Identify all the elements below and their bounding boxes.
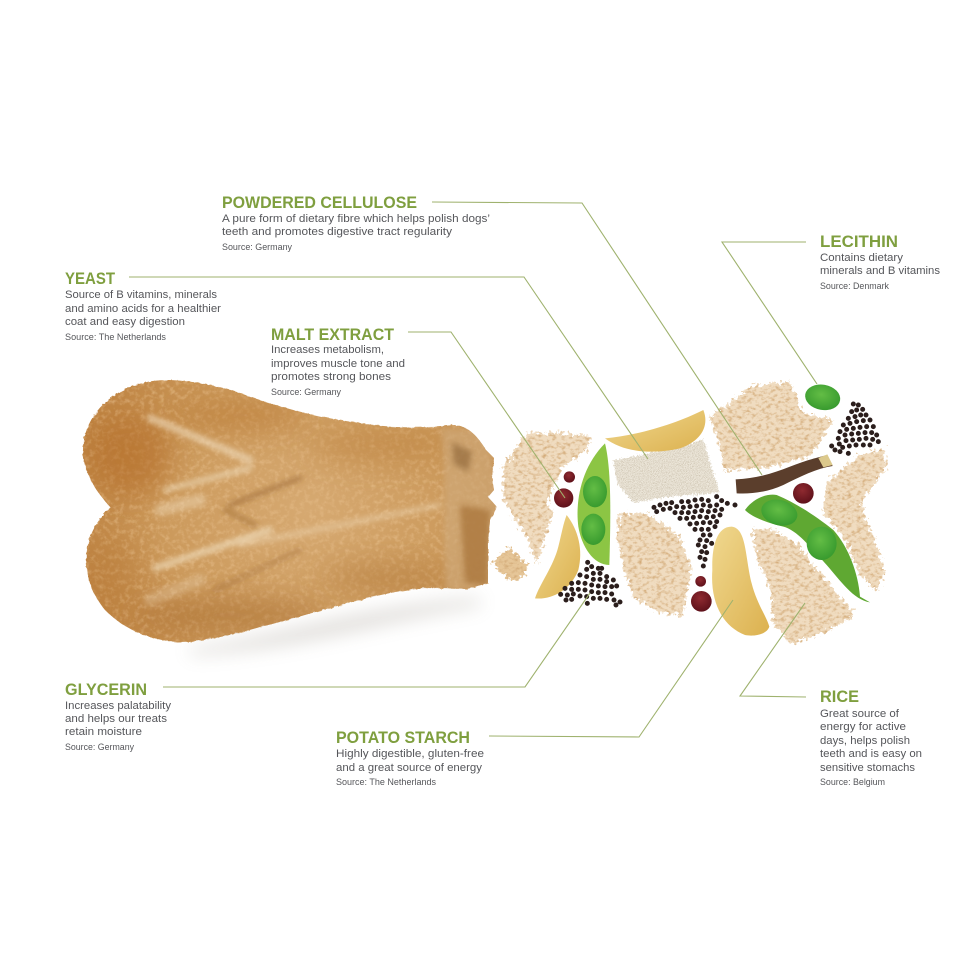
shadow under treat <box>190 598 480 655</box>
peppercorn cluster: top right <box>832 404 878 453</box>
label: lecithin: minerals and B vitamins <box>820 265 940 277</box>
label: malt extract <box>271 326 405 397</box>
label: potato starch: Highly digestible, gluten-free <box>336 748 484 760</box>
rice: top right patch <box>710 382 833 470</box>
ingredient pile <box>493 382 887 643</box>
label: rice <box>820 688 922 787</box>
rice: right patch <box>823 448 887 592</box>
label: malt extract: improves muscle tone and <box>271 358 405 370</box>
label: powdered cellulose: A pure form of dietary fibre which helps polish dogs’ <box>222 213 490 225</box>
label: yeast: and amino acids for a healthier <box>65 303 221 315</box>
rice: bottom patch <box>752 528 855 643</box>
label: lecithin: Source: Denmark <box>820 281 889 291</box>
label: powdered cellulose <box>222 194 490 252</box>
label: malt extract: MALT EXTRACT <box>271 326 394 344</box>
connector lines <box>129 202 817 737</box>
liquorice root <box>736 454 833 493</box>
pea pod: left <box>578 443 610 565</box>
label: glycerin: retain moisture <box>65 726 142 738</box>
label: powdered cellulose: teeth and promotes digestive tract regularity <box>222 226 453 238</box>
label: yeast: coat and easy digestion <box>65 316 185 328</box>
label: rice: sensitive stomachs <box>820 762 915 774</box>
peppercorn cluster: bottom <box>561 562 620 605</box>
rice: left patch <box>503 433 590 565</box>
rice: centre patch <box>618 513 692 615</box>
label: lecithin: Contains dietary <box>820 252 904 264</box>
potato wedge: left <box>535 515 580 599</box>
label: yeast: Source of B vitamins, minerals <box>65 289 218 301</box>
crumb of treat <box>493 547 528 582</box>
label: glycerin: Increases palatability <box>65 700 172 712</box>
label: glycerin <box>65 681 172 752</box>
label: potato starch: Source: The Netherlands <box>336 777 436 787</box>
label: glycerin: and helps our treats <box>65 713 168 725</box>
label: malt extract: Source: Germany <box>271 387 341 397</box>
label: rice: days, helps polish <box>820 735 910 747</box>
malt extract drops <box>554 471 814 612</box>
label: yeast <box>65 270 221 342</box>
label: yeast: Source: The Netherlands <box>65 332 166 342</box>
potato wedge: large <box>712 527 769 636</box>
label: powdered cellulose: POWDERED CELLULOSE <box>222 194 417 212</box>
label: potato starch: POTATO STARCH <box>336 729 470 747</box>
label: lecithin <box>820 233 940 291</box>
peppercorn cluster: centre <box>654 497 735 566</box>
label: rice: Source: Belgium <box>820 777 885 787</box>
label: glycerin: Source: Germany <box>65 742 134 752</box>
potato wedge: top <box>605 410 705 452</box>
label: rice: RICE <box>820 688 859 706</box>
pea pod: right <box>745 495 870 602</box>
label: rice: teeth and is easy on <box>820 748 922 760</box>
label: rice: energy for active <box>820 721 906 733</box>
lecithin bean <box>803 382 842 413</box>
label: rice: Great source of <box>820 708 900 720</box>
powdered cellulose pile <box>613 440 719 502</box>
label: powdered cellulose: Source: Germany <box>222 242 292 252</box>
label: lecithin: LECITHIN <box>820 233 898 251</box>
label: malt extract: Increases metabolism, <box>271 344 384 356</box>
label: glycerin: GLYCERIN <box>65 681 147 699</box>
label: malt extract: promotes strong bones <box>271 371 392 383</box>
label: potato starch: and a great source of energy <box>336 762 483 774</box>
label: yeast: YEAST <box>65 270 115 288</box>
label: potato starch <box>336 729 484 787</box>
dental treat bone <box>83 380 498 642</box>
